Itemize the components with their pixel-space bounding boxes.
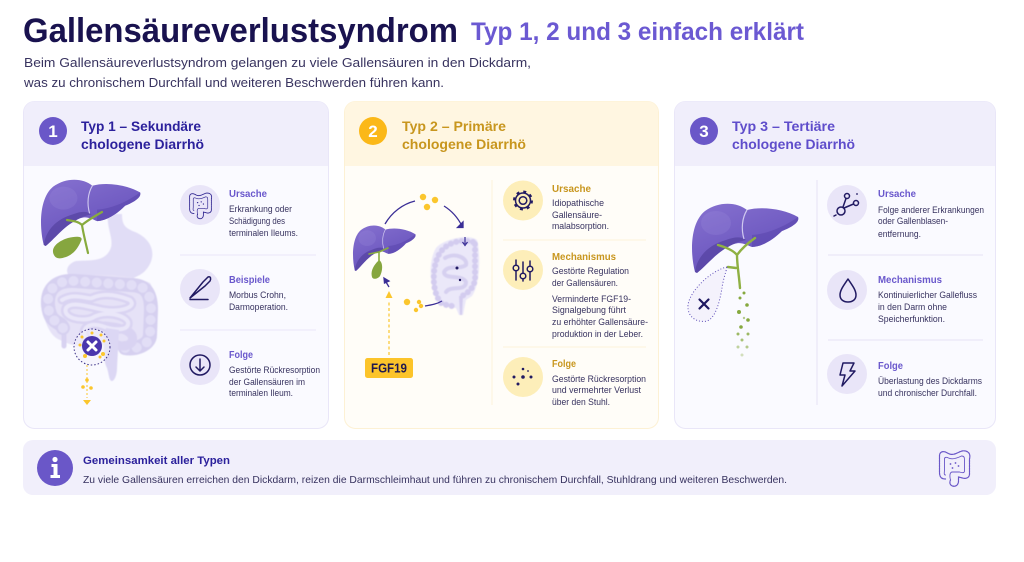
item: Mechanismus: Mechanismus — [552, 251, 616, 263]
icon: intestine — [940, 451, 970, 486]
label FGF19 — [365, 358, 413, 378]
heading Typ 1: Typ 1 – Sekundäre — [81, 118, 201, 134]
item: Mechanismus: produktion in der Leber. — [552, 329, 643, 340]
stomach and intestines — [43, 214, 156, 381]
item: Ursache: Ursache — [552, 183, 591, 195]
heading: Gemeinsamkeit aller Typen — [83, 455, 230, 467]
icon: intestine — [180, 185, 220, 225]
liver — [353, 225, 416, 271]
item: Folge — [503, 357, 646, 408]
icon: scalpel — [180, 269, 220, 309]
item: Folge: Gestörte Rückresorption — [552, 374, 646, 385]
item: Ursache: Ursache — [878, 188, 916, 200]
item: Mechanismus: Mechanismus — [878, 274, 942, 286]
item: Ursache — [503, 180, 609, 232]
icon: info — [37, 450, 73, 486]
title: Gallensäureverlustsyndrom — [23, 12, 458, 50]
item: Folge: Überlastung des Dickdarms — [878, 376, 982, 387]
item: Mechanismus: zu erhöhter Gallensäure- — [552, 317, 648, 328]
item: Mechanismus: Gestörte Regulation — [552, 266, 629, 277]
bile duct — [369, 248, 388, 262]
item: Beispiele: Darmoperation. — [229, 302, 288, 313]
number badge 2: 2 — [368, 122, 378, 141]
intro text — [23, 55, 531, 90]
number badge 2 — [359, 117, 387, 145]
intro text: was zu chronischem Durchfall und weiteren Beschwerden führen kann. — [23, 75, 444, 90]
icon: drop — [827, 270, 867, 310]
item: Mechanismus — [827, 270, 977, 325]
colon — [431, 237, 479, 315]
item: Ursache: oder Gallenblasen- — [878, 216, 948, 227]
item: Ursache — [180, 185, 298, 239]
bile duct — [718, 238, 755, 288]
marker: damaged ileum — [74, 329, 110, 365]
number badge 1 — [39, 117, 67, 145]
text: Zu viele Gallensäuren erreichen den Dickdarm, reizen die Darmschleimhaut und führen zu chronischem Durchfall, Stuhldrang und weiteren Beschwerden. — [83, 474, 787, 486]
item: Folge: Folge — [229, 349, 253, 361]
liver — [41, 180, 140, 246]
heading Typ 1 — [81, 118, 204, 152]
heading Typ 3 — [732, 118, 855, 152]
item: Mechanismus: Speicherfunktion. — [878, 314, 945, 325]
icon: sliders — [503, 250, 543, 290]
icon: arrow down — [180, 345, 220, 385]
panel: Gemeinsamkeit — [23, 440, 996, 495]
item: Ursache: Schädigung des — [229, 216, 285, 227]
heading Typ 2: chologene Diarrhö — [402, 136, 526, 152]
illustration: enterohepatic cycle — [353, 194, 479, 378]
item: Folge: Folge — [878, 360, 903, 372]
illustration: liver without gallbladder — [688, 204, 798, 356]
item: Folge: und chronischer Durchfall. — [878, 388, 977, 399]
illustration: digestive tract — [41, 180, 156, 405]
subtitle: Typ 1, 2 und 3 einfach erklärt — [471, 18, 805, 46]
missing gallbladder outline — [688, 267, 727, 321]
item: Ursache — [827, 185, 984, 240]
cross — [700, 300, 708, 308]
intro text: Beim Gallensäureverlustsyndrom gelangen zu viele Gallensäuren in den Dickdarm, — [24, 55, 531, 70]
heading Typ 3: Typ 3 – Tertiäre — [732, 118, 835, 134]
bile droplets — [736, 292, 750, 356]
arrow FGF19 — [386, 291, 392, 355]
item: Folge: über den Stuhl. — [552, 397, 610, 408]
number badge 1: 1 — [48, 122, 58, 141]
label FGF19: FGF19 — [371, 362, 407, 376]
icon: duct branch — [827, 185, 867, 225]
number badge 3: 3 — [699, 122, 709, 141]
item: Mechanismus: in den Darm ohne — [878, 302, 947, 313]
item: Mechanismus: Kontinuierlicher Gallefluss — [878, 290, 977, 301]
item: Mechanismus: der Gallensäuren. — [552, 278, 618, 289]
bile acid dots — [404, 194, 438, 312]
item: Folge: Gestörte Rückresorption — [229, 365, 320, 376]
item: Ursache: terminalen Ileums. — [229, 228, 298, 239]
bile duct — [67, 212, 102, 253]
icon: lightning — [827, 354, 867, 394]
item: Ursache: Folge anderer Erkrankungen — [878, 205, 984, 216]
icon: gear — [503, 180, 543, 220]
heading Typ 2: Typ 2 – Primäre — [402, 118, 506, 134]
cycle arrows — [384, 201, 463, 306]
icon: scattered dots — [503, 357, 543, 397]
item: Ursache: Gallensäure- — [552, 210, 602, 221]
item: Ursache: entfernung. — [878, 229, 921, 240]
item: Mechanismus: Verminderte FGF19- — [552, 294, 631, 305]
item: Beispiele — [180, 269, 288, 313]
item: Folge: der Gallensäuren im — [229, 377, 305, 388]
item: Folge: und vermehrter Verlust — [552, 385, 641, 396]
liver — [692, 204, 798, 273]
gallbladder — [372, 260, 382, 279]
item: Beispiele: Morbus Crohn, — [229, 290, 286, 301]
item: Ursache: malabsorption. — [552, 221, 609, 232]
arrow: bile acid loss — [81, 365, 93, 405]
item: Ursache: Idiopathische — [552, 198, 604, 209]
heading Typ 1: chologene Diarrhö — [81, 136, 204, 152]
panel: Typ 2 — [344, 102, 658, 428]
item: Folge: terminalen Ileum. — [229, 388, 293, 399]
panel: Typ 1 — [24, 102, 328, 428]
item: Folge — [827, 354, 982, 399]
item: Folge — [180, 345, 320, 399]
item: Mechanismus — [503, 250, 648, 340]
heading Typ 2 — [402, 118, 526, 152]
item: Mechanismus: Signalgebung führt — [552, 305, 626, 316]
item: Ursache: Ursache — [229, 188, 267, 200]
item: Folge: Folge — [552, 358, 576, 370]
item: Beispiele: Beispiele — [229, 274, 270, 286]
number badge 3 — [690, 117, 718, 145]
panel: Typ 3 — [674, 102, 996, 428]
heading Typ 3: chologene Diarrhö — [732, 136, 855, 152]
arrow into colon — [462, 237, 468, 246]
gallbladder — [53, 237, 82, 258]
item: Ursache: Erkrankung oder — [229, 204, 292, 215]
